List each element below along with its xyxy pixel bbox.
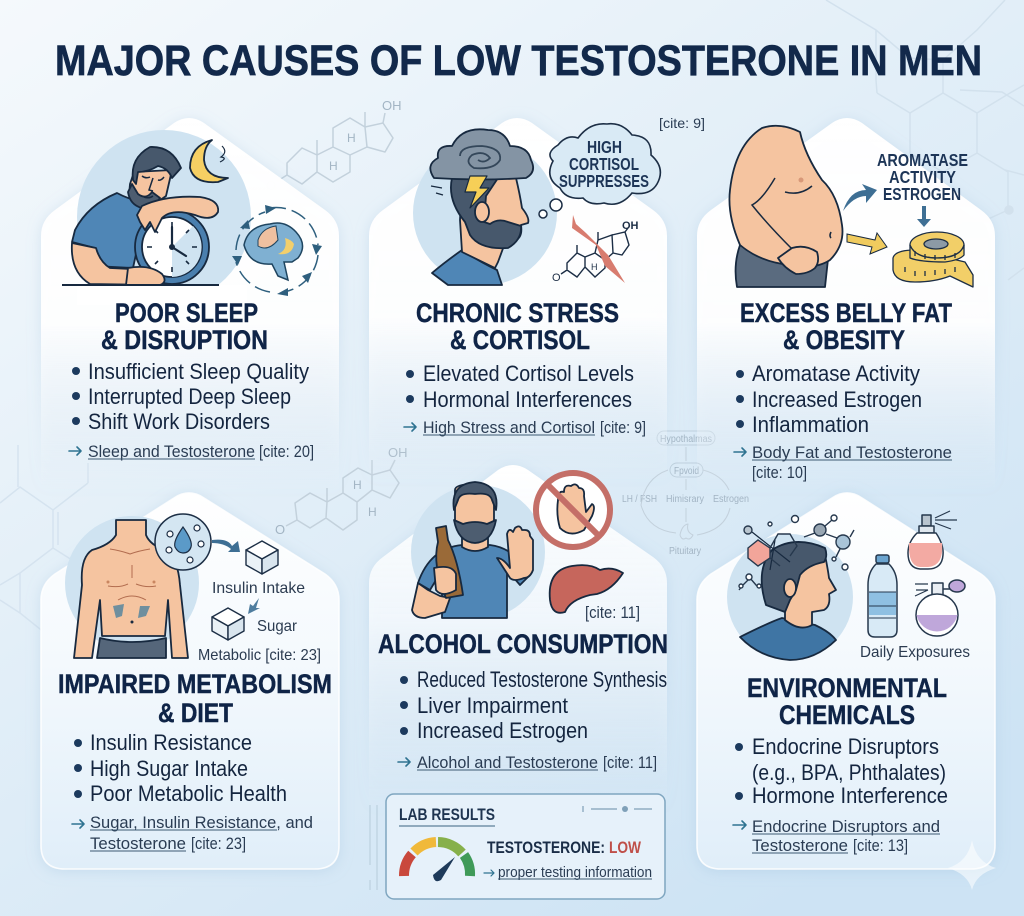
heading: environmental chemicals: CHEMICALS (779, 700, 915, 730)
heading: excess belly fat: & OBESITY (783, 325, 905, 355)
background steroid molecule: lower: OH (388, 445, 408, 460)
background hormone axis diagram: Pituitary (669, 546, 701, 557)
panel: card 6 background (697, 493, 995, 869)
illustration: torso with belly fat (729, 126, 842, 287)
link: sugar insulin resistance: Testosterone (90, 834, 186, 853)
link: sleep and testosterone: Sleep and Testosterone (88, 442, 255, 461)
link: body fat and testosterone: Body Fat and Testosterone (752, 443, 952, 462)
bullet list: environmental (735, 734, 948, 808)
bullet list: chronic stress: Elevated Cortisol Levels (423, 361, 634, 386)
link: high stress and cortisol: High Stress and Cortisol (423, 418, 595, 437)
icon: testosterone molecule with red slash (552, 215, 639, 284)
background hormone axis diagram: Estrogen (713, 494, 749, 505)
background hormone axis diagram: Hypothalmas (660, 434, 712, 445)
panel: card 1 background (41, 118, 339, 490)
label group: insulin and sugar (198, 580, 321, 664)
bullet list: impaired metabolism: Insulin Resistance (90, 730, 252, 755)
bullet list: alcohol: Increased Estrogen (417, 718, 588, 743)
background hormone axis diagram: LH / FSH (622, 494, 657, 505)
link: endocrine disruptors (733, 817, 940, 855)
icon: testosterone molecule with red slash: O (552, 272, 561, 284)
callout: aromatase activity estrogen: ACTIVITY (889, 167, 956, 187)
heading: environmental chemicals: ENVIRONMENTAL (747, 673, 947, 703)
link: alcohol and testosterone: [cite: 11] (603, 753, 657, 772)
link: sugar insulin resistance: Sugar, Insulin Resistance, and (90, 813, 313, 832)
heading: chronic stress (416, 298, 619, 355)
arrow: blue curved (843, 184, 877, 211)
heading: poor sleep (101, 298, 268, 355)
background steroid molecule: top: OH (382, 98, 402, 113)
bullet list: alcohol: Liver Impairment (417, 693, 568, 718)
panel: card 3 background (697, 118, 995, 490)
icon: sugar cube upper (246, 541, 278, 574)
label group: insulin and sugar: Insulin Intake (212, 580, 305, 597)
icon: spray bottle (908, 511, 957, 569)
testing link: proper testing information (498, 864, 652, 881)
heading: poor sleep: & DISRUPTION (101, 325, 268, 355)
heading: excess belly fat: EXCESS BELLY FAT (740, 298, 952, 328)
icon: testosterone molecule with red slash: H (591, 262, 598, 272)
label group: insulin and sugar: Sugar (257, 618, 298, 635)
bullet list: environmental: Hormone Interference (752, 783, 948, 808)
background hormone axis diagram: Himisrary (666, 494, 704, 505)
background steroid molecule: lower: H (368, 505, 377, 519)
icon: liver (550, 565, 623, 613)
bullet list: environmental: Endocrine Disruptors (752, 734, 939, 759)
arrow: cube link (248, 598, 260, 614)
icon: insulin drop circle (155, 514, 211, 570)
icon: perfume atomizer (915, 580, 965, 636)
bullet list: excess belly fat: Inflammation (752, 412, 869, 437)
callout: high cortisol suppresses (539, 124, 660, 218)
icon: sugar cube lower (212, 608, 244, 640)
heading: impaired metabolism (58, 669, 332, 728)
link: endocrine disruptors: [cite: 13] (853, 836, 908, 855)
callout: high cortisol suppresses: HIGH (587, 137, 622, 157)
label group: insulin and sugar: Metabolic [cite: 23] (198, 647, 321, 664)
bullet list: impaired metabolism: Poor Metabolic Health (90, 781, 287, 806)
background steroid molecule: lower: H (353, 478, 362, 492)
heading: poor sleep: POOR SLEEP (115, 298, 258, 328)
bullet list: excess belly fat: Increased Estrogen (752, 387, 922, 412)
background steroid molecule: top: H (329, 159, 338, 173)
citation: cite 9: [cite: 9] (659, 115, 705, 131)
link: sugar insulin resistance: [cite: 23] (191, 834, 246, 853)
heading: excess belly fat (740, 298, 952, 355)
icon: measuring tape (893, 232, 973, 287)
icon: crescent moon (190, 140, 228, 182)
gauge (404, 842, 470, 881)
icon: water bottle (868, 555, 897, 637)
status text: TESTOSTERONE: (487, 838, 605, 857)
bullet list: poor sleep: Insufficient Sleep Quality (88, 359, 309, 384)
link: sugar insulin resistance (72, 813, 313, 853)
illustration: man profile with chemicals (727, 532, 853, 660)
bullet list: excess belly fat: Aromatase Activity (752, 361, 920, 386)
icon: no hand sign (536, 473, 610, 547)
background steroid molecule: top: O (266, 178, 276, 193)
icon: chemical molecules (739, 515, 854, 590)
bullet list: poor sleep: Interrupted Deep Sleep (88, 384, 291, 409)
heading: impaired metabolism: IMPAIRED METABOLISM (58, 669, 332, 699)
background steroid molecule: lower (275, 445, 408, 537)
heading: environmental chemicals (747, 673, 947, 730)
panel: lab results (386, 794, 665, 899)
callout: high cortisol suppresses: SUPPRESSES (559, 171, 649, 191)
bullet list: excess belly fat (736, 361, 922, 437)
citation: cite 11: [cite: 11] (585, 603, 640, 622)
bullet list: impaired metabolism (74, 730, 287, 806)
link: endocrine disruptors: Endocrine Disruptors and (752, 817, 940, 836)
decoration: sparkle (948, 840, 996, 890)
callout: aromatase activity estrogen (877, 150, 968, 204)
link: endocrine disruptors: Testosterone (752, 836, 848, 855)
panel: lab results: LOW (609, 838, 642, 857)
link: high stress and cortisol: [cite: 9] (600, 418, 646, 437)
background steroid molecule: top (266, 98, 402, 193)
icon: testosterone molecule with red slash: OH (622, 220, 639, 232)
callout: aromatase activity estrogen: AROMATASE (877, 150, 968, 170)
label: daily exposures: Daily Exposures (860, 644, 970, 661)
heading: impaired metabolism: & DIET (158, 698, 233, 728)
arrow: down to tape (917, 206, 931, 227)
icon: brain with sleep cycle arrows (232, 205, 322, 296)
heading: chronic stress: & CORTISOL (450, 325, 590, 355)
background hormone axis diagram: Fpvoid (674, 466, 699, 477)
background hormone axis diagram (622, 431, 749, 557)
panel: card 2 background (369, 118, 667, 480)
callout: high cortisol suppresses: CORTISOL (569, 154, 639, 174)
link: body fat and testosterone: [cite: 10] (752, 463, 807, 482)
bullet list: poor sleep (72, 359, 309, 434)
bullet list: alcohol: Reduced Testosterone Synthesis (417, 667, 667, 692)
link: sleep and testosterone: [cite: 20] (259, 442, 314, 461)
link: alcohol and testosterone: Alcohol and Testosterone (417, 753, 598, 772)
background hexagon pattern: left (0, 445, 88, 637)
bullet list: chronic stress: Hormonal Interferences (423, 387, 632, 412)
panel: card 5 background (369, 465, 667, 810)
bullet list: chronic stress (406, 361, 634, 412)
arrow: drop to cube (212, 540, 240, 552)
heading: alcohol consumption: ALCOHOL CONSUMPTION (378, 629, 668, 659)
illustration: man with bottle refusing (411, 482, 545, 619)
background steroid molecule: top: H (347, 131, 356, 145)
heading: chronic stress: CHRONIC STRESS (416, 298, 619, 328)
lab results heading: LAB RESULTS (399, 805, 495, 824)
arrow: yellow to tape (847, 233, 887, 254)
illustration: sleeping man with clock (62, 130, 251, 305)
illustration: bare torso (65, 516, 199, 658)
panel: card 4 background (41, 493, 339, 869)
background steroid molecule: lower: O (275, 522, 285, 537)
bullet list: alcohol (400, 667, 667, 743)
callout: aromatase activity estrogen: ESTROGEN (883, 184, 961, 204)
link: body fat and testosterone (734, 443, 952, 482)
bullet list: impaired metabolism: High Sugar Intake (90, 756, 248, 781)
bullet list: environmental: (e.g., BPA, Phthalates) (752, 760, 946, 785)
decoration near lab results (370, 805, 377, 890)
background hexagon pattern: top right (826, 0, 1024, 280)
illustration: stressed man profile (413, 129, 557, 285)
bullet list: poor sleep: Shift Work Disorders (88, 409, 270, 434)
